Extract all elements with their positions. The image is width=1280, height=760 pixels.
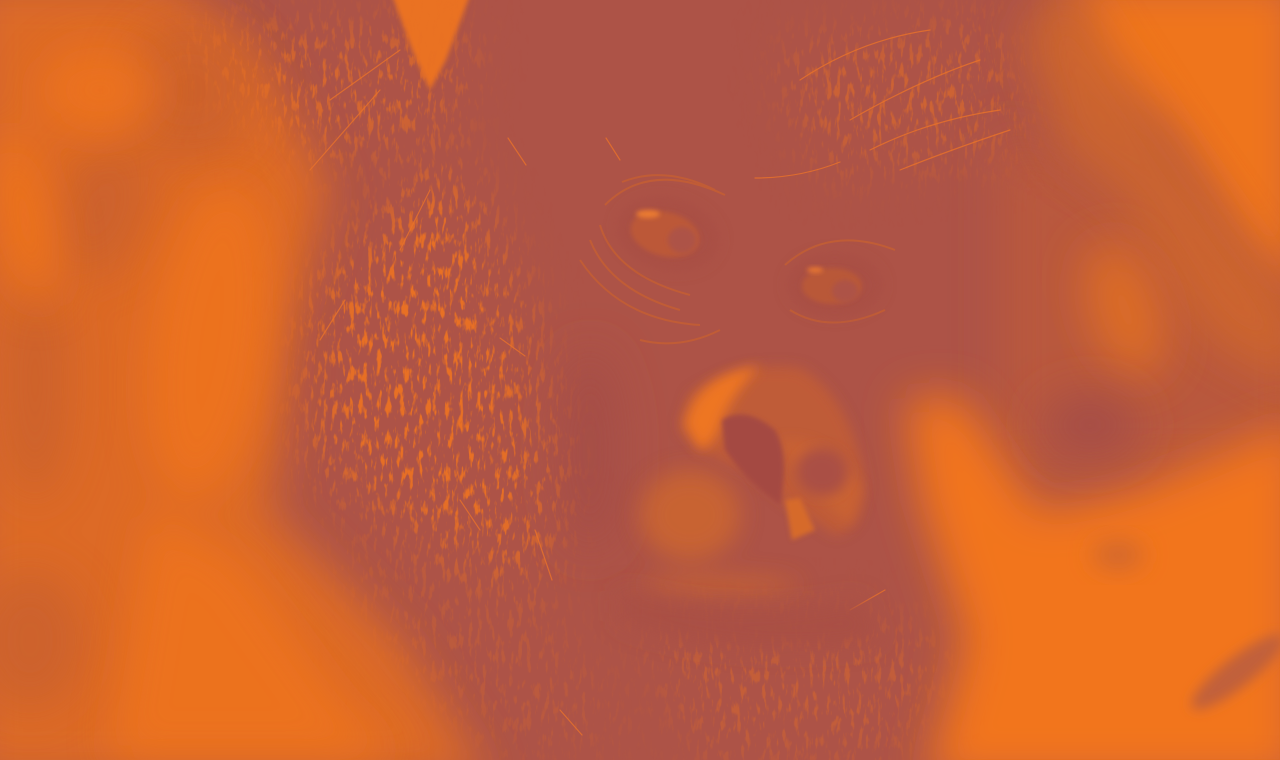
left nostril [722,414,784,505]
foliage: bottom right blur [905,395,1280,760]
right nostril [796,448,848,496]
dark fur shadows [560,350,1140,550]
foliage: bottom right dark leaf gap [1183,624,1280,720]
right fur tone [1000,130,1280,470]
foreground foliage: left blur [0,0,490,760]
mouth shadow [620,590,880,647]
foliage: right centre blot [1069,232,1181,388]
foliage: left bright leaves [0,45,400,760]
foliage: top tip leaf [392,0,470,90]
philtrum highlight [785,498,815,540]
eye socket wrinkles [785,240,895,322]
nose left bright rim [685,366,760,450]
left eye [580,175,727,343]
fur strands [310,30,1010,735]
foliage: right mid-tone blot [1020,0,1280,390]
nose tip highlight [780,440,862,525]
nose bridge highlight [680,367,865,535]
face: muzzle glow [640,470,800,593]
right eye [785,240,895,322]
foliage: top right blur [1070,0,1280,300]
foliage: small soft gap [1092,540,1144,570]
fur texture highlights [204,7,1024,760]
foliage shading: left mid tones [0,20,260,710]
eye socket wrinkles [580,175,725,343]
nose [680,366,865,540]
